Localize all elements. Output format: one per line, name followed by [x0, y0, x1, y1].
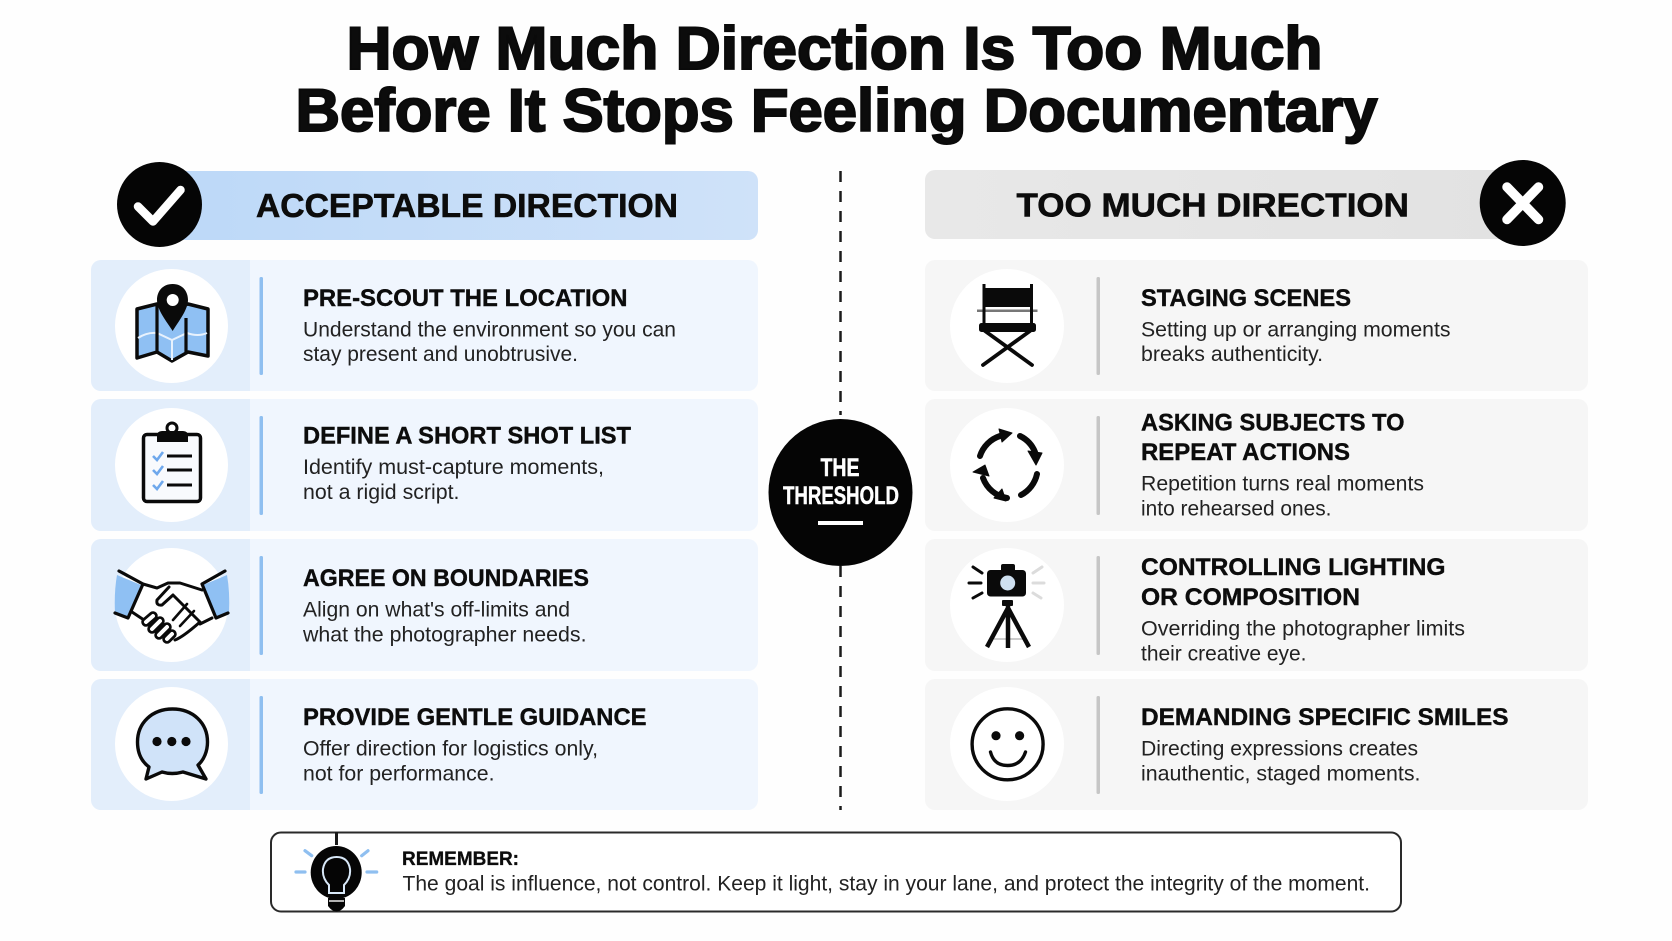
card: asking subjects to repeat actions: [925, 399, 1588, 531]
text: controlling lighting or composition: [1141, 554, 1465, 666]
text: asking subjects to repeat actions: [1141, 410, 1424, 520]
card: controlling lighting or composition: [925, 539, 1588, 671]
text: define a short shot list: Identify must-capture moments,: [303, 456, 604, 479]
card: staging scenes: [925, 260, 1588, 391]
text: provide gentle guidance: [303, 704, 646, 786]
panel: acceptable direction: [91, 162, 758, 810]
title: How Much Direction Is Too Much: [346, 15, 1322, 82]
text: provide gentle guidance: PROVIDE GENTLE GUIDANCE: [303, 704, 646, 731]
text: provide gentle guidance: Offer direction for logistics only,: [303, 738, 598, 760]
text: agree on boundaries: what the photographer needs.: [302, 624, 586, 646]
header: acceptable direction: [117, 162, 758, 247]
callout: remember: [271, 832, 1401, 912]
text: pre-scout the location: stay present and unobtrusive.: [303, 343, 578, 366]
icon: map with pin: [115, 269, 228, 383]
icon: handshake: [115, 548, 229, 662]
header: too much direction: TOO MUCH DIRECTION: [1016, 186, 1409, 224]
text: demanding specific smiles: DEMANDING SPECIFIC SMILES: [1141, 704, 1508, 731]
card: provide gentle guidance: [91, 679, 758, 810]
text: pre-scout the location: [303, 285, 676, 366]
text: staging scenes: STAGING SCENES: [1141, 285, 1351, 312]
text: controlling lighting or composition: CONTROLLING LIGHTING: [1141, 554, 1446, 581]
card: define a short shot list: [91, 399, 758, 531]
text: define a short shot list: [303, 422, 631, 504]
icon: circular repeat arrows: [950, 408, 1064, 522]
icon: check mark: [117, 162, 202, 247]
text: staging scenes: breaks authenticity.: [1141, 343, 1323, 366]
card: demanding specific smiles: [925, 679, 1588, 810]
icon: camera on tripod: [950, 548, 1064, 662]
card: pre-scout the location: [91, 260, 758, 391]
text: agree on boundaries: [302, 565, 589, 646]
icon: director's chair: [950, 269, 1064, 383]
text: define a short shot list: DEFINE A SHORT SHOT LIST: [303, 422, 631, 450]
text: controlling lighting or composition: Overriding the photographer limits: [1141, 618, 1465, 640]
icon: light bulb: [296, 832, 377, 912]
text: remember message: The goal is influence, not control. Keep it light, stay in your lane, and protect the integrity of the moment.: [402, 872, 1370, 896]
text: agree on boundaries: Align on what's off-limits and: [303, 598, 570, 622]
text: asking subjects to repeat actions: ASKING SUBJECTS TO: [1141, 410, 1404, 436]
text: asking subjects to repeat actions: Repetition turns real moments: [1141, 472, 1424, 496]
center dashed divider: [839, 171, 842, 810]
text: remember message: [402, 848, 1370, 896]
text: remember message: REMEMBER:: [402, 848, 519, 870]
panel: too much direction: [925, 160, 1588, 810]
text: provide gentle guidance: not for performance.: [303, 762, 494, 786]
badge: the threshold: THRESHOLD: [783, 482, 899, 510]
icon: x mark: [1480, 160, 1566, 246]
badge: the threshold: [768, 419, 912, 566]
text: staging scenes: Setting up or arranging moments: [1141, 318, 1450, 342]
text: asking subjects to repeat actions: REPEAT ACTIONS: [1141, 439, 1350, 466]
text: controlling lighting or composition: their creative eye.: [1141, 642, 1306, 666]
text: pre-scout the location: Understand the environment so you can: [303, 318, 676, 342]
text: staging scenes: [1141, 285, 1450, 366]
text: controlling lighting or composition: OR COMPOSITION: [1141, 584, 1360, 611]
header: too much direction: [925, 160, 1566, 246]
text: demanding specific smiles: inauthentic, staged moments.: [1141, 762, 1420, 786]
text: asking subjects to repeat actions: into rehearsed ones.: [1141, 498, 1332, 520]
text: demanding specific smiles: [1141, 704, 1508, 786]
title: [296, 15, 1378, 144]
title: Before It Stops Feeling Documentary: [296, 77, 1378, 144]
icon: clipboard checklist: [115, 408, 228, 522]
card: agree on boundaries: [91, 539, 758, 671]
badge: the threshold: THE: [820, 454, 860, 482]
text: demanding specific smiles: Directing expressions creates: [1141, 738, 1418, 760]
icon: smiley face: [950, 687, 1064, 801]
text: define a short shot list: not a rigid script.: [303, 481, 460, 504]
text: pre-scout the location: PRE-SCOUT THE LOCATION: [303, 285, 628, 312]
header: acceptable direction: ACCEPTABLE DIRECTION: [256, 187, 678, 224]
icon: speech bubble: [115, 687, 228, 801]
text: agree on boundaries: AGREE ON BOUNDARIES: [303, 565, 589, 592]
